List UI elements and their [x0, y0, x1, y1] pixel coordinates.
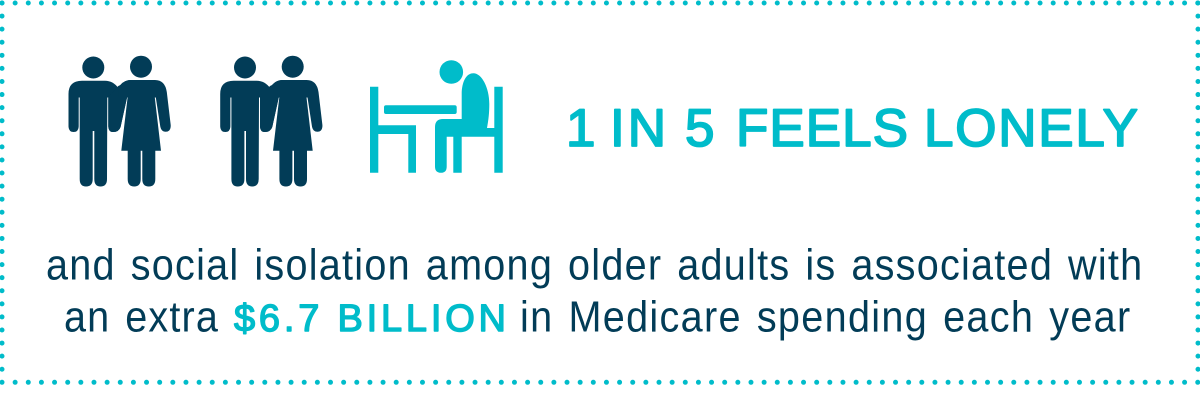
icon: second couple [220, 56, 322, 186]
headline: IN [610, 99, 666, 158]
body text line 1: and social isolation among older adults is associated with [46, 240, 1142, 289]
icon: first couple [68, 56, 171, 186]
headline: LONELY [924, 99, 1138, 158]
icon: lonely person at table [370, 60, 503, 173]
headline [566, 99, 1138, 158]
body text line 2: in Medicare spending each year [520, 292, 1130, 341]
body text line 2: an extra [64, 292, 219, 341]
body text line 2 [64, 292, 1130, 341]
headline: 1 [566, 99, 595, 158]
highlighted amount: $6.7 BILLION [234, 298, 506, 340]
headline: 5 [685, 99, 714, 158]
headline: FEELS [736, 99, 908, 158]
